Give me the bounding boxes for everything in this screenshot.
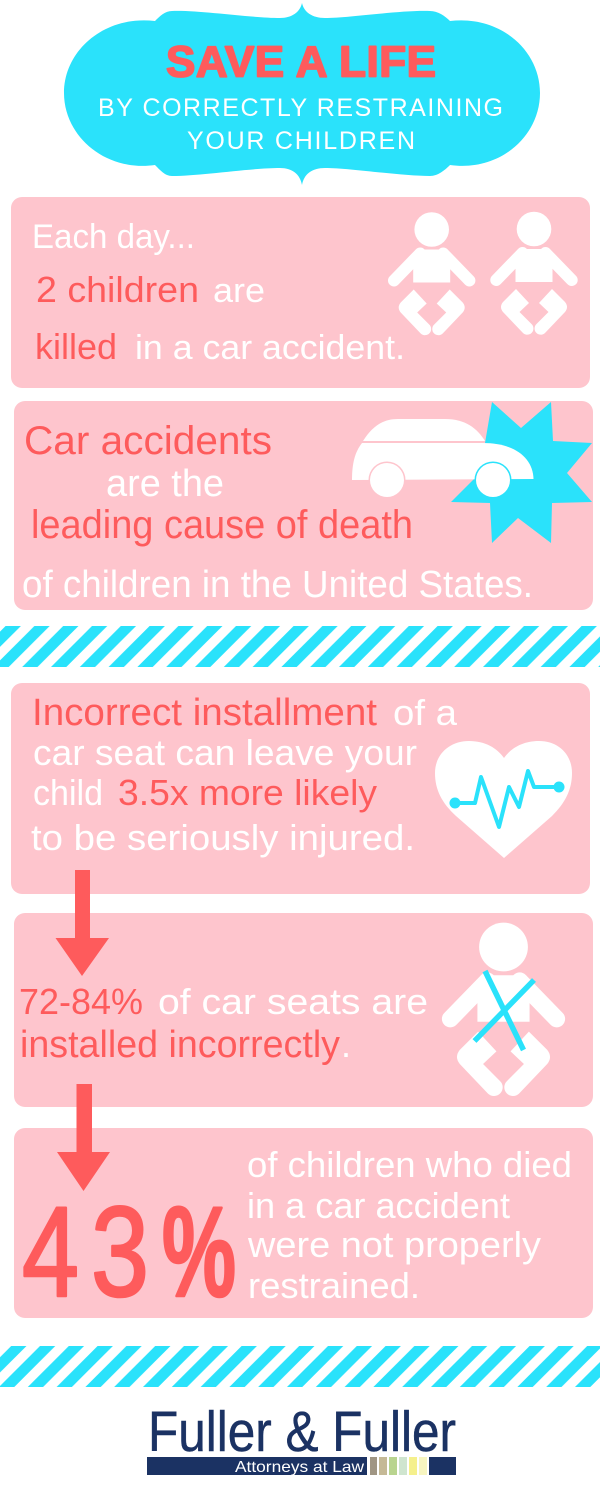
text: leading cause statement: Car accidents xyxy=(24,419,272,463)
subtitle: YOUR CHILDREN xyxy=(187,127,415,155)
icon: baby right xyxy=(496,212,572,335)
arrow: second down arrow xyxy=(57,1084,110,1191)
panel: car seats installed incorrectly xyxy=(14,913,593,1107)
text: car seat statistic: . xyxy=(341,1024,351,1065)
text: each day statistic: Each day... xyxy=(32,218,195,256)
arrow: first down arrow xyxy=(56,870,109,976)
text: car seat statistic: 72-84% xyxy=(19,981,143,1022)
icon: baby left xyxy=(394,212,469,335)
text: leading cause statement: leading cause of death xyxy=(31,503,413,547)
big number: 3 xyxy=(91,1181,149,1324)
text: car seat statistic: of car seats are xyxy=(158,981,428,1022)
text: leading cause statement: are the xyxy=(106,463,224,505)
icon: car xyxy=(352,419,534,498)
icon: baby with crossed belts xyxy=(450,923,557,1096)
text: incorrect installment statement: 3.5x more likely xyxy=(118,772,377,813)
panel: 43 percent not restrained xyxy=(14,1128,593,1324)
text: each day statistic: are xyxy=(213,272,265,310)
title badge xyxy=(64,3,540,185)
text: restraint statement: restrained. xyxy=(248,1265,420,1306)
big number: 4 xyxy=(22,1181,79,1324)
panel: leading cause of death xyxy=(14,401,593,610)
text: each day statistic: 2 children xyxy=(36,269,199,310)
text: incorrect installment statement: Incorrect installment xyxy=(32,692,377,734)
logo: Fuller and Fuller: Fuller & Fuller xyxy=(148,1400,456,1464)
text: restraint statement: were not properly xyxy=(247,1224,541,1265)
text: each day statistic: killed xyxy=(35,326,117,367)
icon: crash burst xyxy=(451,402,592,543)
text: restraint statement: in a car accident xyxy=(247,1185,510,1226)
subtitle xyxy=(98,94,503,155)
text: incorrect installment statement: to be seriously injured. xyxy=(31,817,415,858)
text: each day statistic xyxy=(32,218,405,367)
text: leading cause statement xyxy=(22,419,533,606)
panel: incorrect installment xyxy=(11,683,590,894)
logo: Fuller and Fuller: Attorneys at Law xyxy=(235,1459,364,1476)
text: car seat statistic xyxy=(19,981,428,1066)
text: car seat statistic: installed incorrectly xyxy=(20,1024,340,1066)
text: incorrect installment statement: car seat can leave your xyxy=(33,732,417,773)
text: incorrect installment statement: of a xyxy=(393,692,458,733)
text: incorrect installment statement: child xyxy=(33,772,103,813)
text: incorrect installment statement xyxy=(31,692,458,858)
striped divider xyxy=(0,626,600,667)
text: leading cause statement: of children in the United States. xyxy=(22,564,533,606)
title heading: SAVE A LIFE xyxy=(166,38,436,86)
text: each day statistic: in a car accident. xyxy=(135,329,405,367)
icon: heart with pulse xyxy=(435,741,572,858)
text: restraint statement xyxy=(247,1144,572,1306)
big number: % xyxy=(162,1181,236,1324)
text: restraint statement: of children who died xyxy=(247,1144,572,1185)
striped divider xyxy=(0,1346,600,1387)
subtitle: BY CORRECTLY RESTRAINING xyxy=(98,94,503,122)
panel: two children each day xyxy=(11,197,590,388)
